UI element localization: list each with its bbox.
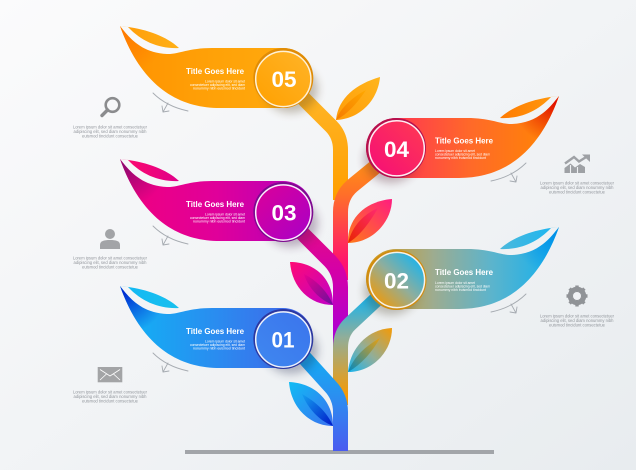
icon: magnifier (102, 98, 119, 116)
caption: envelope (73, 390, 148, 404)
branch 04 (340, 150, 396, 280)
banner text 01: nonummy nibh euismod tincidunt (193, 346, 245, 350)
banner text 03: nonummy nibh euismod tincidunt (193, 220, 245, 224)
ground line (185, 450, 494, 454)
caption: user (73, 256, 148, 270)
caption: user: Lorem ipsum dolor sit amet consectetuer (73, 256, 148, 260)
icon: growth chart (564, 154, 590, 173)
leaf: magenta left (290, 262, 333, 305)
tree stem and branches (283, 78, 397, 451)
banner text 03: Lorem ipsum dolor sit amet (205, 212, 245, 216)
branch 01 (283, 334, 340, 451)
banner text 05: nonummy nibh euismod tincidunt (193, 86, 245, 90)
upper leaf (500, 96, 559, 118)
icon: user (100, 229, 120, 249)
caption: magnifier (73, 124, 148, 138)
caption: magnifier: adipiscing elit, sed diam nonummy nibh (74, 129, 147, 134)
banner body (366, 227, 559, 309)
banner text 01 (186, 326, 245, 350)
banner text 02: Title Goes Here (435, 267, 493, 277)
badge 02: 02 (384, 268, 409, 294)
banner 05 (120, 26, 313, 108)
arrow 01 (153, 353, 188, 372)
badge 01: 01 (272, 328, 294, 352)
badge 01 (253, 309, 318, 374)
leaf: red right (348, 199, 392, 243)
banner body (120, 286, 313, 368)
upper leaf (120, 26, 179, 48)
caption: growth chart (540, 180, 615, 194)
banner text 04: consectetuer adipiscing elit, sed diam (435, 152, 490, 156)
branch 03 (283, 214, 340, 350)
banner text 04: Lorem ipsum dolor sit amet (435, 149, 475, 153)
caption: magnifier: euismod tincidunt consectetue (82, 134, 139, 138)
arrow 05 (153, 93, 188, 112)
banner text 04 (435, 136, 493, 160)
banner text 05: consectetuer adipiscing elit, sed diam (190, 83, 245, 87)
banner body (120, 159, 313, 241)
banner text 02: nonummy nibh euismod tincidunt (435, 288, 486, 292)
banner text 03: Title Goes Here (186, 199, 244, 209)
caption: gear (540, 314, 615, 328)
upper leaf (120, 286, 179, 308)
branch 02 (340, 280, 397, 405)
caption: growth chart: Lorem ipsum dolor sit amet consectetuer (540, 180, 615, 186)
badge 02 (364, 250, 426, 315)
arrow 04 (491, 163, 526, 182)
banner text 04: nonummy nibh euismod tincidunt (435, 156, 486, 160)
caption: envelope: euismod tincidunt consectetue (82, 398, 139, 404)
badge 03: 03 (272, 200, 296, 226)
caption: gear: Lorem ipsum dolor sit amet consectetuer (540, 314, 615, 318)
banner text 02: consectetuer adipiscing elit, sed diam (435, 284, 490, 288)
caption: growth chart: euismod tincidunt consectetue (549, 190, 606, 194)
banner text 04: Title Goes Here (435, 136, 493, 146)
banner text 05 (186, 66, 245, 90)
caption: user: adipiscing elit, sed diam nonummy nibh (74, 260, 147, 265)
upper leaf (500, 227, 559, 249)
banner body (366, 96, 559, 178)
banner text 05: Title Goes Here (186, 66, 244, 76)
caption: gear: euismod tincidunt consectetue (549, 322, 606, 328)
caption: growth chart: adipiscing elit, sed diam nonummy nibh (540, 185, 614, 190)
arrow 02 (491, 294, 526, 313)
banner text 01: Lorem ipsum dolor sit amet (205, 340, 245, 344)
banner text 02: Lorem ipsum dolor sit amet (435, 281, 475, 285)
banner 01 (120, 286, 313, 368)
caption: gear: adipiscing elit, sed diam nonummy nibh (540, 318, 614, 323)
banner text 05: Lorem ipsum dolor sit amet (205, 80, 245, 84)
leaf: orange top right (336, 77, 380, 120)
caption: user: euismod tincidunt consectetue (82, 264, 139, 270)
banner 04 (366, 96, 559, 178)
banner text 02 (435, 267, 493, 292)
banner body (120, 26, 313, 108)
icon: gear (566, 286, 588, 306)
banner text 03 (186, 199, 245, 224)
badge 03 (253, 182, 318, 247)
badge 05 (253, 48, 318, 113)
caption: envelope: adipiscing elit, sed diam nonummy nibh (74, 394, 147, 399)
badge 04: 04 (384, 137, 410, 162)
caption: envelope: Lorem ipsum dolor sit amet consectetuer (73, 390, 148, 394)
branch 05 (283, 78, 340, 200)
upper leaf (120, 159, 179, 181)
banner text 03: consectetuer adipiscing elit, sed diam (190, 216, 245, 220)
caption: magnifier: Lorem ipsum dolor sit amet consectetuer (73, 124, 148, 130)
arrow 03 (153, 226, 188, 245)
icon: envelope (98, 367, 122, 382)
leaf: blue left (289, 382, 333, 426)
badge 04 (364, 118, 426, 183)
badge 05: 05 (272, 67, 296, 92)
leaf: teal and orange right (348, 328, 392, 372)
banner text 01: Title Goes Here (186, 326, 244, 336)
banner 02 (366, 227, 559, 309)
banner text 01: consectetuer adipiscing elit, sed diam (190, 343, 245, 347)
banner 03 (120, 159, 313, 241)
